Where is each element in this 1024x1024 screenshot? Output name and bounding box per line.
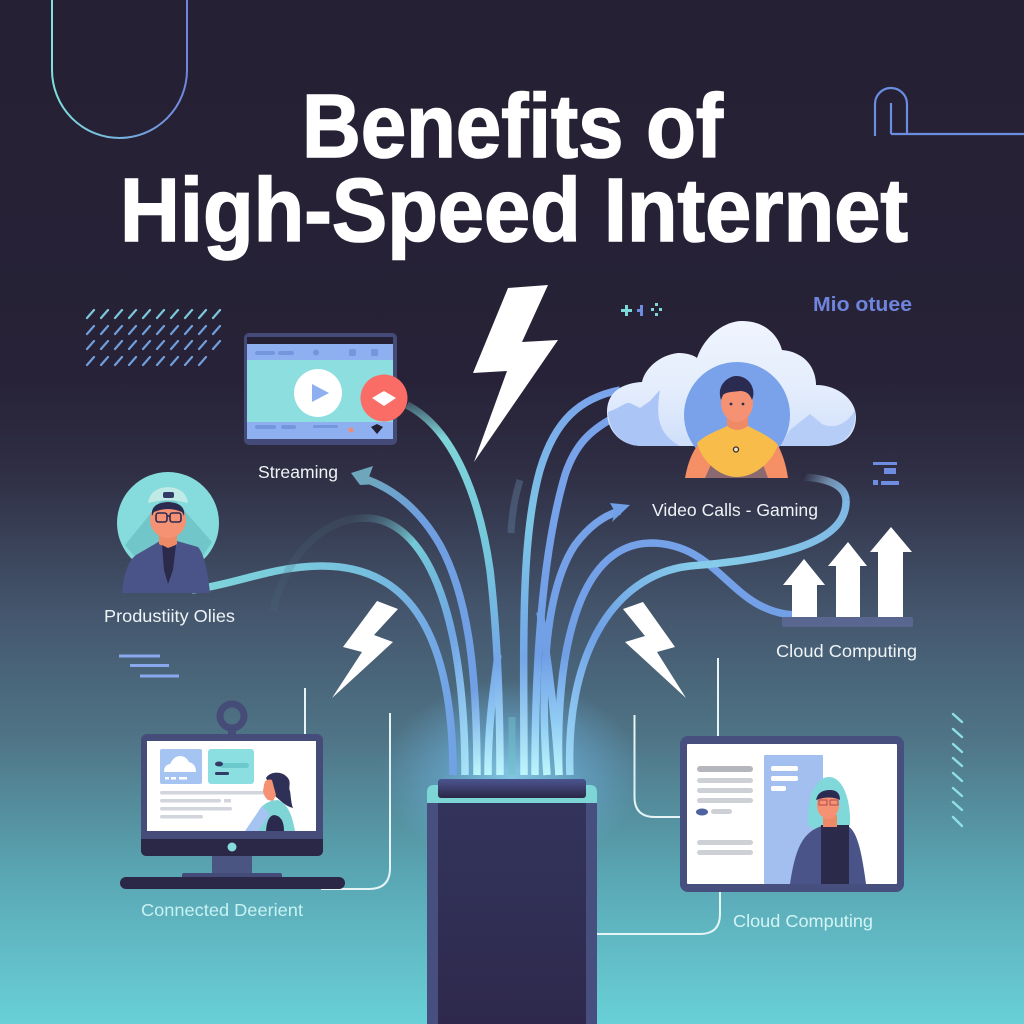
hair [152,502,184,516]
player footer [247,422,393,439]
footer dot [348,428,354,432]
footer icon [371,424,383,434]
dash pattern right [953,714,962,826]
hair [816,790,840,800]
top right label: Mio otuee [813,294,912,316]
fibre optic bundle [192,390,846,775]
video area [247,360,393,422]
teal top [258,800,295,831]
text lines [160,791,265,818]
blue card [160,749,202,784]
small symbols top [621,303,662,316]
blue circle [684,362,790,468]
tower inner [438,803,586,1024]
small bars icon right [873,462,899,485]
dark lap [266,815,284,831]
face [817,791,839,819]
face [150,502,186,538]
footer controls [255,425,338,429]
webcam [220,704,244,728]
panel: streaming player [244,333,408,445]
tower cap [438,779,586,798]
undershirt [162,545,176,584]
arrowhead: to video calls [610,503,630,522]
arms [685,442,788,478]
play triangle [312,384,329,402]
glasses [819,800,838,805]
monitor foot [182,873,282,879]
panel: upward arrows chart [782,527,913,627]
face [721,384,753,422]
badge diamond [372,391,396,406]
teal circle [117,472,219,574]
panel: tablet [680,736,904,892]
header controls [255,349,378,356]
title: High-Speed Internet [120,161,908,261]
monitor stem [212,854,252,876]
panel: left person [117,472,219,593]
decorative U outline [52,0,187,138]
arrow 1 [783,559,825,617]
label: connected: Connected Deerient [141,900,303,920]
cap badge [163,492,174,498]
shirt [697,426,778,477]
panel lines [771,766,798,791]
chart base [782,617,913,627]
monitor body [141,734,323,856]
eyes [730,403,744,405]
panel: cloud with person [607,321,856,478]
player frame [244,333,397,445]
hair [720,376,753,400]
cloud right hill [780,410,855,446]
dash pattern top left [87,310,220,365]
panel: desktop monitor [120,704,345,889]
neck [159,532,177,549]
seated person [245,773,295,831]
card dots [165,777,187,780]
teal card lines [220,763,249,768]
arrow 2 [828,542,867,617]
cloud [607,321,856,446]
neck [823,815,837,827]
label: productivity: Produstiity Olies [104,606,235,626]
shirt button [734,447,738,452]
arrowhead: to streaming [351,466,378,485]
screen [147,741,316,831]
cloud left hill [608,390,680,446]
hair [266,773,293,808]
card cloud [164,756,196,772]
blue side panel [764,755,823,884]
label: video calls gaming: Video Calls ‑ Gaming [652,500,818,520]
title: Benefits of [302,77,724,177]
right small lightning bolt [623,602,686,698]
label: streaming: Streaming [258,462,338,482]
tower body [427,803,597,1024]
large lightning bolt [473,285,558,462]
title [120,77,908,261]
power dot [228,842,236,852]
glasses [156,513,181,522]
tablet screen [687,744,897,884]
tablet frame [680,736,904,892]
text lines [697,766,753,855]
jacket [122,541,210,593]
neck [727,414,748,434]
webcam neck [228,728,236,735]
pill [696,808,708,816]
jacket [790,826,866,884]
arrow 3 [870,527,912,617]
player top bar [247,337,393,345]
circle shade [125,500,212,556]
desk base [120,877,345,889]
decorative arch line [875,88,1024,136]
white connector lines [305,658,720,934]
monitor chin [141,839,323,856]
shirt underside [705,462,768,478]
blue arm [245,806,270,831]
label: cloud computing upper: Cloud Computing [776,641,917,661]
face [263,780,276,801]
panel: server tower [427,779,597,1024]
player header [247,344,393,360]
cap dome [148,487,188,503]
left small lightning bolt [332,601,398,698]
red badge [360,374,408,422]
play button [294,369,342,417]
label: cloud computing lower: Cloud Computing [733,911,873,931]
small bar decoration left [119,656,179,676]
teal band [427,785,597,803]
teal card [208,749,254,784]
teal card marks [215,762,229,775]
shirt [821,825,849,884]
teal hood [808,777,850,832]
glow above server [382,680,642,870]
